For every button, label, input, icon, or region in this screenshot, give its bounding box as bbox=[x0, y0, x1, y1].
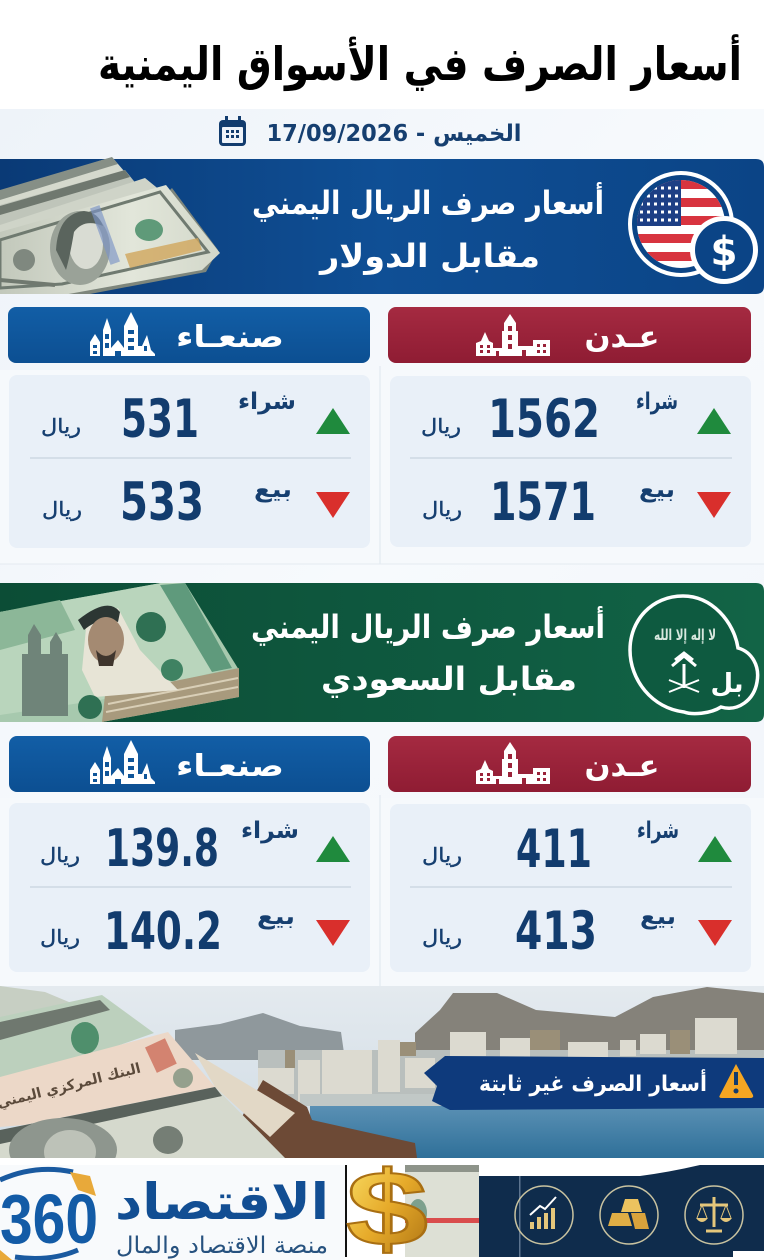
Aden rates card: 1571 bbox=[490, 472, 596, 533]
image: Saudi riyal bills stack bbox=[0, 583, 239, 722]
Aden rates card: بيع bbox=[640, 904, 676, 930]
Aden rates card: ريال bbox=[422, 497, 462, 521]
Aden rates card: 411 bbox=[516, 819, 592, 880]
Aden rates card bbox=[390, 376, 751, 547]
icon: gold bars bbox=[600, 1186, 658, 1244]
Sanaa header bbox=[9, 736, 370, 792]
icon: Aden skyline bbox=[476, 314, 550, 356]
Aden rates card: ريال bbox=[422, 843, 462, 867]
logo: Al-Iqtisad 360: 360 bbox=[0, 1180, 98, 1258]
Sanaa rates card: 139.8 bbox=[105, 819, 219, 879]
Sanaa header: صنعـاء bbox=[176, 320, 284, 355]
date text: الخميس - 17/09/2026 bbox=[266, 121, 522, 147]
Sanaa rates card: 531 bbox=[121, 389, 199, 450]
icon: calendar bbox=[219, 116, 246, 146]
Aden rates card: بيع bbox=[639, 477, 675, 503]
panel: riyal banner bbox=[0, 583, 764, 722]
Aden rates card: 413 bbox=[515, 901, 597, 962]
icon: US flag with dollar coin: $ bbox=[710, 229, 738, 275]
panel: SAR Sanaa bbox=[9, 736, 370, 972]
icon: Sanaa skyline bbox=[90, 312, 155, 356]
heading: dollar banner: أسعار صرف الريال اليمني bbox=[252, 182, 604, 222]
panel: dollar banner bbox=[0, 157, 764, 295]
heading: dollar banner bbox=[252, 182, 604, 275]
heading: riyal banner: أسعار صرف الريال اليمني bbox=[251, 606, 605, 646]
panel: dark services strip bbox=[479, 1165, 764, 1257]
Aden rates card: 1562 bbox=[488, 389, 600, 450]
icon: Aden skyline bbox=[476, 742, 550, 784]
Aden header bbox=[388, 307, 751, 363]
Sanaa header: صنعـاء bbox=[176, 749, 284, 784]
building bbox=[22, 624, 68, 716]
Aden header bbox=[388, 736, 751, 792]
icon: US flag with dollar coin bbox=[628, 171, 758, 284]
money pile: البنك المركزي اليمني bbox=[0, 1061, 143, 1113]
panel: SAR Aden bbox=[388, 736, 751, 972]
icon: growth chart bbox=[515, 1186, 573, 1244]
portrait bbox=[82, 608, 178, 697]
icon: Saudi riyal emblem: بل bbox=[711, 669, 743, 699]
Aden rates card bbox=[390, 804, 751, 972]
Aden rates card: شراء bbox=[636, 389, 678, 415]
Sanaa rates card: ريال bbox=[42, 497, 82, 521]
icon: Saudi riyal emblem bbox=[630, 596, 758, 714]
image: gold dollar sign over banknote bbox=[345, 1165, 479, 1257]
icon: scales bbox=[685, 1186, 743, 1244]
Sanaa rates card: شراء bbox=[241, 818, 299, 844]
heading: dollar banner: مقابل الدولار bbox=[318, 237, 540, 275]
callout: rates not fixed: أسعار الصرف غير ثابتة bbox=[479, 1068, 707, 1097]
Aden rates card: ريال bbox=[422, 925, 462, 949]
Sanaa rates card: ريال bbox=[41, 414, 81, 438]
Sanaa rates card: ريال bbox=[40, 925, 80, 949]
Sanaa rates card: بيع bbox=[254, 477, 292, 503]
callout: rates not fixed bbox=[424, 1056, 764, 1110]
logo: Al-Iqtisad 360: الاقتصاد bbox=[115, 1173, 329, 1231]
Aden header: عـدن bbox=[584, 320, 660, 355]
infographic background bbox=[0, 109, 764, 986]
image: Aden coast photo bbox=[0, 986, 764, 1158]
panel: USD Aden bbox=[388, 307, 751, 547]
Aden rates card: ريال bbox=[421, 414, 461, 438]
Sanaa rates card: 140.2 bbox=[104, 902, 222, 962]
Aden header: عـدن bbox=[584, 749, 660, 784]
Sanaa rates card: بيع bbox=[257, 904, 295, 930]
Sanaa rates card bbox=[9, 803, 370, 972]
Sanaa rates card: ريال bbox=[40, 843, 80, 867]
money pile bbox=[0, 986, 295, 1158]
heading: riyal banner: مقابل السعودي bbox=[321, 660, 577, 698]
date row bbox=[219, 116, 522, 147]
logo: Al-Iqtisad 360: منصة الاقتصاد والمال bbox=[116, 1233, 328, 1259]
panel: USD Sanaa bbox=[8, 307, 370, 548]
Sanaa header bbox=[8, 307, 370, 363]
Sanaa rates card: 533 bbox=[120, 472, 204, 533]
Sanaa rates card: شراء bbox=[238, 389, 296, 415]
rocks bbox=[240, 1080, 417, 1158]
Sanaa rates card bbox=[9, 375, 370, 548]
Aden rates card: شراء bbox=[637, 818, 679, 844]
icon: warning bbox=[719, 1064, 753, 1098]
icon: Sanaa skyline bbox=[90, 740, 155, 784]
logo: Al-Iqtisad 360 bbox=[0, 1165, 345, 1260]
image: dollar bills stack bbox=[0, 157, 220, 295]
heading: riyal banner bbox=[251, 606, 605, 698]
icon: Saudi riyal emblem: لا إله إلا الله bbox=[654, 626, 716, 644]
